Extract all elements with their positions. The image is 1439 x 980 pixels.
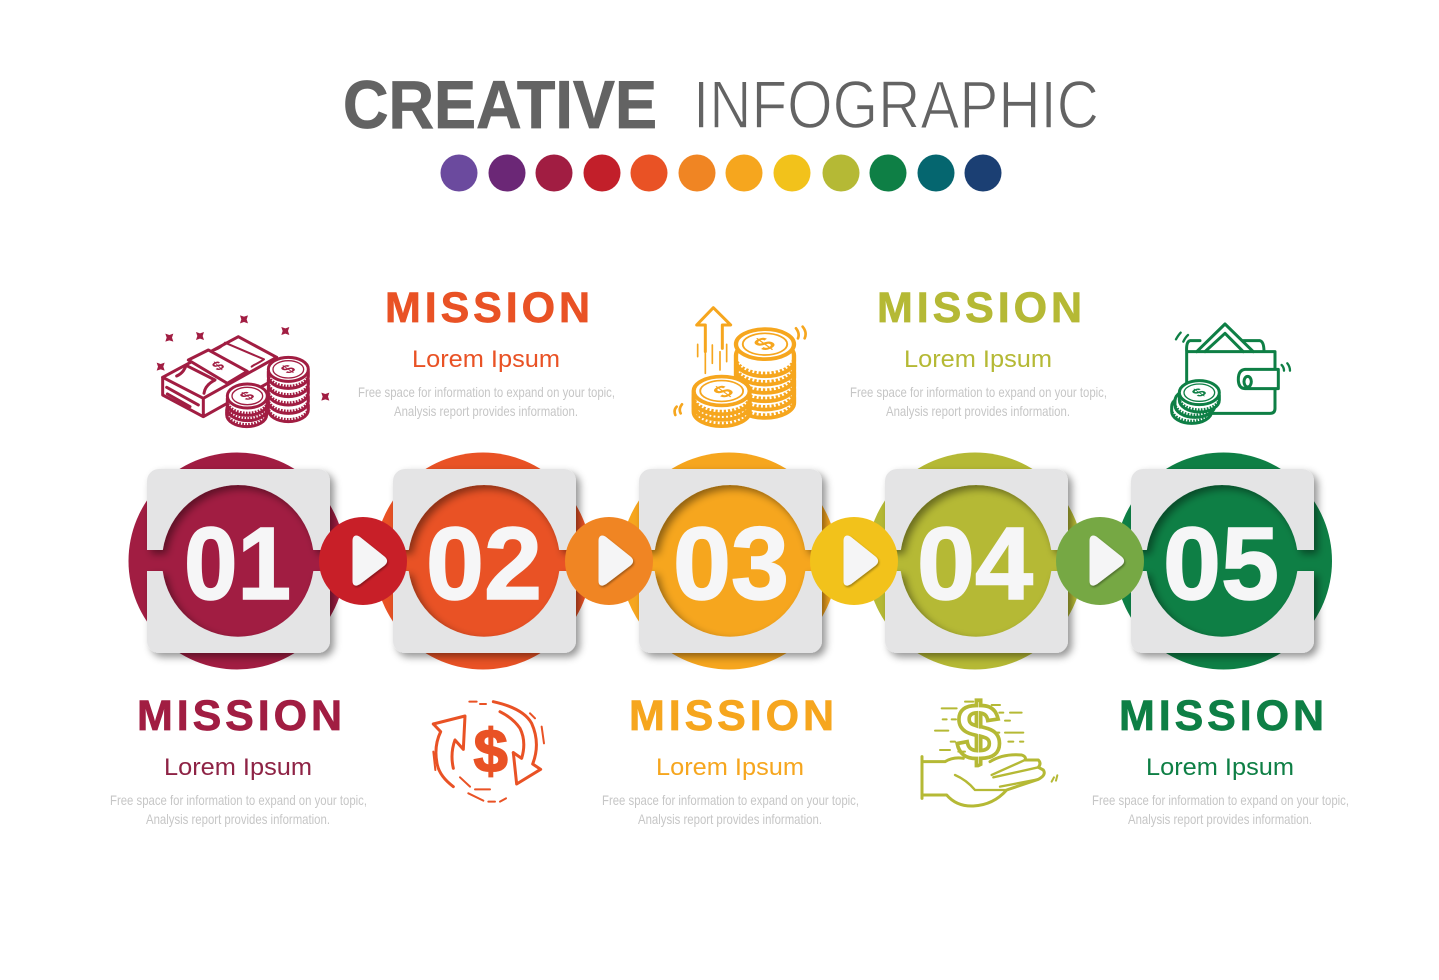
title: CREATIVE: [343, 67, 657, 143]
text block: mission 02: MISSION: [385, 284, 590, 332]
icon: money stack and coins: [157, 315, 329, 427]
icon: coins with up arrow: $: [748, 333, 782, 355]
step 02 badge: 02: [426, 506, 542, 621]
text block: mission 04: Lorem Ipsum: [904, 346, 1052, 373]
arrow 2 to 3: [565, 517, 653, 605]
arrow 4 to 5: [1056, 517, 1144, 605]
icon: money stack and coins: $: [276, 362, 301, 376]
text block: mission 04: Analysis report provides information.: [886, 403, 1070, 419]
icon: coins with up arrow: [675, 308, 806, 426]
text block: mission 01: Free space for information to expand on your topic,: [110, 792, 367, 808]
title: INFOGRAPHIC: [693, 67, 1099, 143]
step 03 badge: [620, 452, 838, 670]
step 05 badge: [1115, 452, 1332, 670]
text block: mission 03: [602, 692, 859, 827]
icon: coins with up arrow: $: [707, 381, 739, 402]
text block: mission 04: [850, 284, 1107, 419]
text block: mission 01: [110, 692, 367, 827]
step 04 badge: [866, 452, 1084, 670]
text block: mission 02: [358, 284, 615, 419]
step 05 badge: 05: [1163, 506, 1279, 621]
text block: mission 05: Lorem Ipsum: [1146, 754, 1294, 781]
text block: mission 02: Free space for information to expand on your topic,: [358, 384, 615, 400]
step 04 badge: 04: [917, 506, 1033, 621]
text block: mission 02: Lorem Ipsum: [412, 346, 560, 373]
text block: mission 05: MISSION: [1119, 692, 1324, 740]
text block: mission 03: Free space for information to expand on your topic,: [602, 792, 859, 808]
icon: hand holding dollar: $: [956, 687, 1001, 776]
icon: dollar exchange arrows: $: [474, 716, 508, 785]
icon: hand holding dollar: [922, 687, 1057, 806]
arrow 3 to 4: [810, 517, 898, 605]
icon: money stack and coins: $: [235, 388, 260, 403]
text block: mission 04: Free space for information to expand on your topic,: [850, 384, 1107, 400]
icon: wallet with coins: [1172, 324, 1290, 423]
text block: mission 02: Analysis report provides information.: [394, 403, 578, 419]
arrow 1 to 2: [319, 517, 407, 605]
text block: mission 04: MISSION: [877, 284, 1082, 332]
title: [343, 67, 1099, 143]
step 01 badge: 01: [184, 506, 291, 621]
text block: mission 01: MISSION: [137, 692, 342, 740]
text block: mission 03: MISSION: [629, 692, 834, 740]
text block: mission 03: Lorem Ipsum: [656, 754, 804, 781]
icon: dollar exchange arrows: [433, 702, 544, 802]
text block: mission 01: Lorem Ipsum: [164, 754, 312, 781]
text block: mission 01: Analysis report provides information.: [146, 811, 330, 827]
step 02 badge: [374, 452, 592, 670]
icon: wallet with coins: $: [1187, 385, 1212, 400]
icon: money stack and coins: $: [209, 358, 229, 374]
colour dots row: [440, 154, 1002, 192]
text block: mission 03: Analysis report provides information.: [638, 811, 822, 827]
step 03 badge: 03: [673, 506, 789, 621]
text block: mission 05: Analysis report provides information.: [1128, 811, 1312, 827]
text block: mission 05: Free space for information to expand on your topic,: [1092, 792, 1349, 808]
step 01 badge: [128, 452, 346, 670]
text block: mission 05: [1092, 692, 1349, 827]
